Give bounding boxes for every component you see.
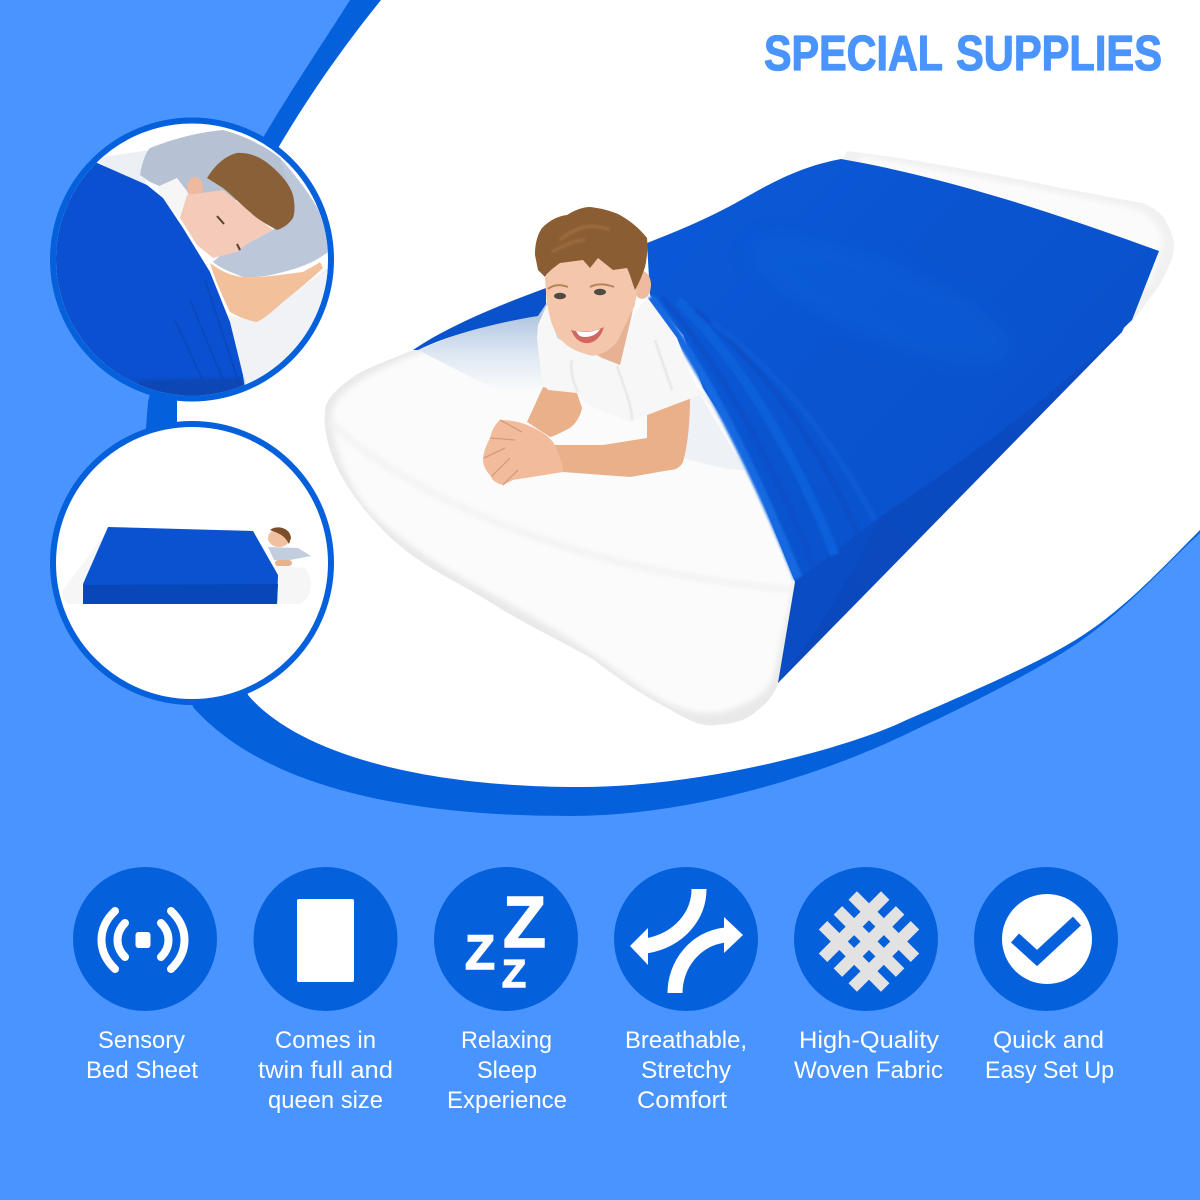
label: Sensory xyxy=(98,1027,185,1054)
inset photo: boy sleeping xyxy=(40,120,335,410)
feature: breathable xyxy=(614,867,758,1114)
feature: woven fabric xyxy=(794,867,943,1084)
icon: stretch arrows xyxy=(614,867,758,1011)
feature: relaxing sleep xyxy=(434,867,578,1114)
boy neck xyxy=(597,310,633,365)
title xyxy=(764,27,1162,81)
bed surface xyxy=(228,268,328,384)
sheet folds xyxy=(175,280,238,385)
boy smile xyxy=(571,327,604,343)
icon: sleep letters xyxy=(434,867,578,1011)
pillow xyxy=(213,158,328,277)
icon: woven mesh xyxy=(794,867,938,1011)
label xyxy=(86,1027,198,1084)
sheet lower corner xyxy=(778,517,880,683)
arm xyxy=(275,560,292,566)
label: Woven Fabric xyxy=(794,1057,943,1084)
sheet folds xyxy=(650,297,875,578)
sheet highlight xyxy=(735,210,1025,390)
inset 1 border xyxy=(53,120,331,398)
boy eyes xyxy=(554,289,606,299)
label xyxy=(794,1027,943,1084)
icon: sleep letters: Z xyxy=(502,953,526,996)
boy shirt shading xyxy=(571,340,672,420)
label: Relaxing xyxy=(461,1027,552,1054)
hair xyxy=(270,527,291,544)
label: Sleep xyxy=(477,1057,537,1084)
boy hair highlights xyxy=(552,226,610,252)
icon: check mark xyxy=(974,867,1118,1011)
white panel xyxy=(177,0,1200,787)
label xyxy=(258,1027,393,1114)
icon: sleep letters: Z xyxy=(503,883,546,963)
label: Breathable, xyxy=(625,1027,747,1054)
sheet side face xyxy=(778,251,1159,683)
sheet top face xyxy=(647,159,1159,582)
label: High-Quality xyxy=(799,1027,939,1054)
boy face xyxy=(545,255,637,356)
hair xyxy=(207,153,294,230)
label: Easy Set Up xyxy=(985,1057,1114,1084)
label: Comfort xyxy=(637,1087,727,1114)
title: SPECIAL xyxy=(764,27,943,81)
icon: mattress rectangle xyxy=(254,867,398,1011)
shaded opening under the sheet xyxy=(418,300,600,392)
boy hair xyxy=(535,207,647,290)
curved band xyxy=(145,0,1200,816)
label: twin full and xyxy=(258,1057,393,1084)
boy arms xyxy=(527,387,690,477)
label xyxy=(625,1027,747,1114)
closed eyes xyxy=(217,216,240,250)
label xyxy=(447,1027,567,1114)
blue sheet xyxy=(56,162,244,396)
label: queen size xyxy=(268,1087,383,1114)
shaded far side of the opening xyxy=(650,395,745,470)
pillow xyxy=(268,547,311,560)
title: SUPPLIES xyxy=(956,27,1162,81)
inset photo: bed from the side xyxy=(53,424,331,702)
sheet hem xyxy=(136,376,246,396)
label: Comes in xyxy=(275,1027,376,1054)
feature: sensory bed sheet xyxy=(73,867,217,1084)
label: Stretchy xyxy=(641,1057,731,1084)
label xyxy=(985,1027,1114,1084)
arm xyxy=(210,262,323,322)
label: Experience xyxy=(447,1087,567,1114)
mattress xyxy=(325,315,797,725)
mattress behind xyxy=(98,150,148,184)
boy shirt xyxy=(537,297,700,422)
icon: sensory waves xyxy=(73,867,217,1011)
mattress surface xyxy=(332,315,795,713)
collar xyxy=(157,178,190,220)
head xyxy=(268,531,288,547)
ear xyxy=(187,177,203,195)
icon: sleep letters: Z xyxy=(465,927,495,980)
label: Bed Sheet xyxy=(86,1057,198,1084)
feature: sizes xyxy=(254,867,398,1114)
main photo: boy under sensory sheet on a bed xyxy=(325,151,1174,725)
boy hands xyxy=(483,420,563,485)
label: Quick and xyxy=(993,1027,1104,1054)
mattress xyxy=(63,530,311,604)
boy eyebrows xyxy=(548,284,614,289)
mattress seam shading xyxy=(328,420,795,590)
inset 2 border xyxy=(53,424,331,702)
grey sleeve xyxy=(140,130,300,200)
face xyxy=(180,190,273,258)
feature: easy set up xyxy=(974,867,1118,1084)
sheet left flap xyxy=(413,288,546,350)
blue sheet xyxy=(83,527,278,604)
boy ear xyxy=(633,271,651,299)
mattress back end xyxy=(840,151,1174,322)
